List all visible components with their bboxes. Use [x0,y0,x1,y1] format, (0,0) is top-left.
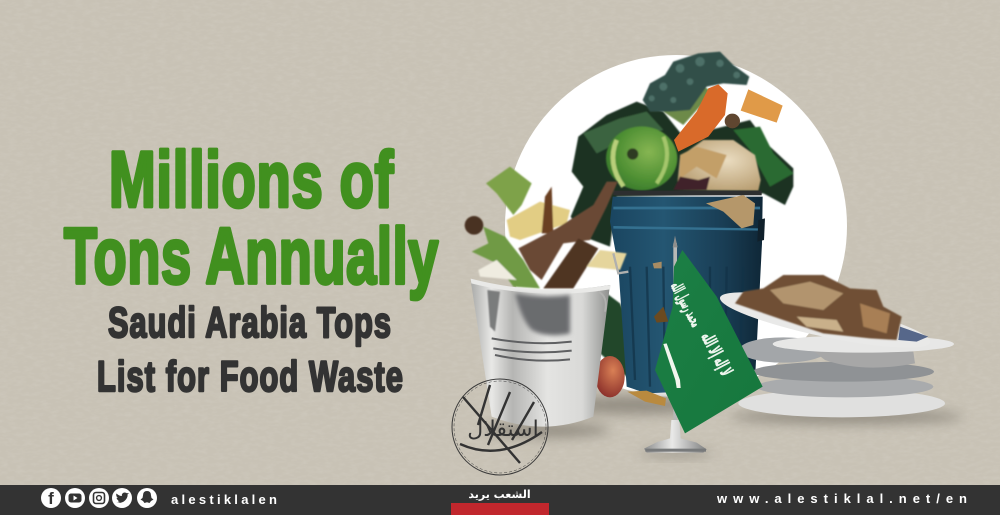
footer bar [0,485,1000,515]
flag shahada: لا إله إلا الله [696,329,736,380]
bucket food [465,167,627,288]
flag cloth [655,250,763,433]
icon: facebook: f [48,489,54,508]
peach [595,356,625,397]
white circle [505,55,847,397]
dark leaves behind bin [571,102,793,377]
orange piece [741,89,783,123]
icon: youtube [65,488,85,508]
handle: alestiklalen [171,492,277,507]
carrot [674,84,728,152]
ground shadow [483,396,963,457]
seal logo: استقلال [467,417,539,442]
broccoli [643,52,749,125]
flag sword [663,343,681,388]
icon: twitter [112,488,132,508]
squash [673,140,761,191]
red tab [451,503,549,515]
nut [725,114,740,128]
main heading: Millions of [109,134,394,224]
subheading: Saudi Arabia Tops [108,299,392,347]
trash bin [610,191,765,393]
website: www.alestiklal.net/en [716,491,967,506]
green tomato [606,126,677,190]
main heading: Tons Annually [64,211,439,300]
icon: snapchat [137,488,157,508]
flag stand [644,236,707,453]
main heading [64,134,439,300]
table flag [644,236,763,453]
food waste illustration [465,52,963,457]
seal logo [452,379,548,475]
plate stack [717,275,954,417]
icon: instagram [89,488,109,508]
subheading [97,299,404,401]
flag shahada: محمد رسول الله [667,278,706,330]
subheading: List for Food Waste [97,353,404,401]
social icons [41,488,157,508]
slogan: الشعب يريد [468,488,531,501]
metal bucket [471,253,628,427]
fallen scrap [627,391,666,406]
